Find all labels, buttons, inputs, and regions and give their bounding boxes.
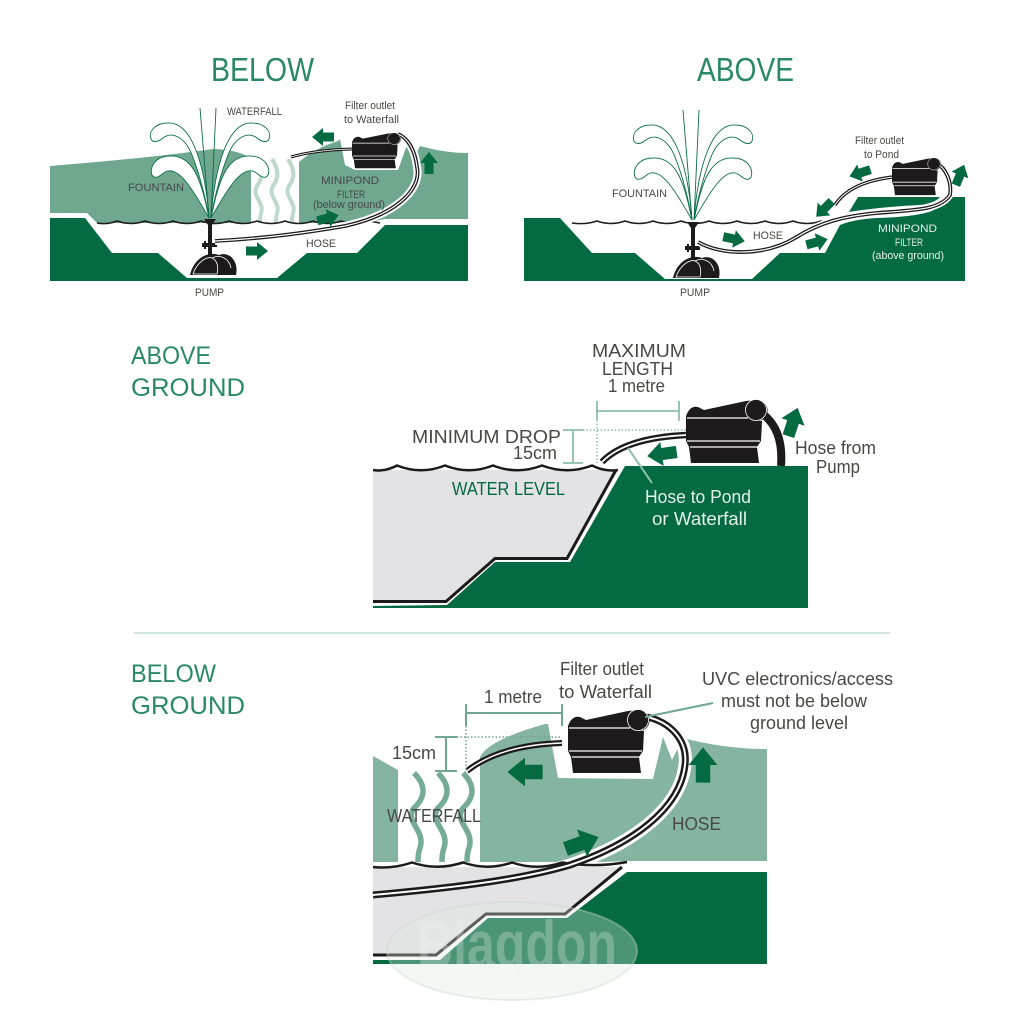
labels: MAXIMUM bbox=[592, 341, 686, 361]
heading: above ground: GROUND bbox=[131, 374, 245, 402]
labels: 15cm bbox=[513, 443, 557, 463]
water line bbox=[373, 466, 618, 470]
labels: 15cm bbox=[392, 743, 436, 763]
heading: above ground bbox=[131, 342, 245, 402]
labels: FOUNTAIN bbox=[128, 182, 184, 194]
dotted guides bbox=[457, 726, 562, 770]
labels: 1 metre bbox=[484, 687, 542, 707]
pump bbox=[190, 219, 237, 275]
divider bbox=[134, 632, 890, 634]
arrows bbox=[246, 128, 438, 260]
labels: must not be below bbox=[721, 691, 868, 711]
grey pond water bbox=[373, 470, 615, 600]
dimension: maximum length bbox=[563, 401, 679, 463]
filter unit bbox=[892, 158, 941, 195]
labels bbox=[387, 659, 893, 834]
labels bbox=[412, 341, 876, 529]
labels: Pump bbox=[816, 457, 860, 477]
panel: light green ground, left bbox=[50, 149, 251, 223]
labels: LENGTH bbox=[602, 359, 673, 379]
labels: Filter outlet bbox=[560, 659, 644, 679]
waterfall stripes bbox=[255, 159, 294, 223]
dark green ground bbox=[373, 872, 767, 964]
labels: Filter outlet bbox=[345, 100, 395, 112]
labels: to Waterfall bbox=[559, 682, 652, 702]
light green ground, right bbox=[480, 724, 767, 862]
fountain bbox=[150, 108, 270, 218]
labels: HOSE bbox=[753, 230, 783, 242]
arrows bbox=[646, 404, 809, 468]
labels: PUMP bbox=[680, 287, 710, 299]
hose bbox=[373, 717, 685, 895]
labels: (below ground) bbox=[313, 199, 385, 211]
grey pond water bbox=[373, 867, 620, 955]
heading: below ground: GROUND bbox=[131, 692, 245, 720]
filter unit bbox=[352, 133, 401, 168]
dimension lines bbox=[435, 704, 562, 771]
title: ABOVE: ABOVE bbox=[697, 51, 794, 88]
labels: MINIPOND bbox=[321, 175, 379, 187]
water line bbox=[373, 862, 627, 867]
watermark: Blagdon: Blagdon bbox=[417, 907, 617, 981]
labels: Hose from bbox=[795, 438, 876, 458]
labels: WATER LEVEL bbox=[452, 479, 565, 499]
labels: HOSE bbox=[306, 238, 336, 250]
pump bbox=[673, 222, 720, 278]
labels: FOUNTAIN bbox=[612, 188, 667, 200]
labels: Filter outlet bbox=[855, 135, 904, 147]
panel: light green ground, right bbox=[299, 139, 468, 223]
diagram: above-ground detail bbox=[373, 341, 876, 608]
heading: below ground: BELOW bbox=[131, 660, 216, 688]
water line bbox=[572, 221, 827, 224]
arrows bbox=[721, 161, 972, 254]
dotted guides bbox=[583, 420, 686, 463]
labels: PUMP bbox=[195, 287, 224, 299]
hose bbox=[215, 134, 418, 241]
arrows bbox=[507, 747, 717, 863]
labels: Hose to Pond bbox=[645, 487, 751, 507]
labels: UVC electronics/access bbox=[702, 669, 893, 689]
hose white surround bbox=[556, 738, 692, 862]
labels: FILTER bbox=[337, 189, 365, 201]
dark green ground bbox=[50, 218, 468, 281]
heading: below ground bbox=[131, 660, 245, 720]
labels: to Waterfall bbox=[344, 114, 399, 126]
UVC leader line bbox=[645, 703, 713, 717]
labels: MINIPOND bbox=[878, 223, 937, 235]
diagram: below-ground overview bbox=[50, 100, 468, 299]
labels: to Pond bbox=[864, 149, 899, 161]
labels: FILTER bbox=[895, 237, 923, 249]
pond liner bbox=[373, 470, 616, 602]
dark green ground bbox=[373, 466, 808, 608]
labels: HOSE bbox=[672, 814, 721, 834]
labels: 1 metre bbox=[608, 376, 665, 396]
heading: above ground: ABOVE bbox=[131, 342, 211, 370]
labels bbox=[128, 100, 399, 299]
diagram: below-ground detail bbox=[373, 659, 893, 964]
labels: WATERFALL bbox=[227, 106, 282, 118]
watermark: Blagdon bbox=[387, 902, 637, 1000]
title: BELOW: BELOW bbox=[211, 51, 315, 88]
hose from pump bbox=[760, 412, 781, 466]
labels: ground level bbox=[750, 713, 848, 733]
filter unit bbox=[686, 400, 768, 463]
labels: WATERFALL bbox=[387, 806, 481, 826]
upper ground strip bbox=[849, 197, 940, 212]
hose to pond bbox=[602, 435, 686, 462]
light green ground, left bbox=[373, 756, 398, 862]
labels: (above ground) bbox=[872, 250, 944, 262]
leader line bbox=[628, 448, 652, 483]
pond liner bbox=[373, 867, 622, 955]
fountain bbox=[633, 110, 753, 220]
dark green ground bbox=[524, 197, 965, 281]
filter unit bbox=[568, 710, 650, 773]
labels bbox=[612, 135, 944, 299]
water line bbox=[97, 221, 380, 224]
labels: or Waterfall bbox=[652, 509, 747, 529]
hose bbox=[698, 163, 950, 252]
diagram: above-ground overview bbox=[524, 110, 972, 299]
waterfall stripes bbox=[411, 773, 472, 862]
labels: MINIMUM DROP bbox=[412, 427, 561, 447]
